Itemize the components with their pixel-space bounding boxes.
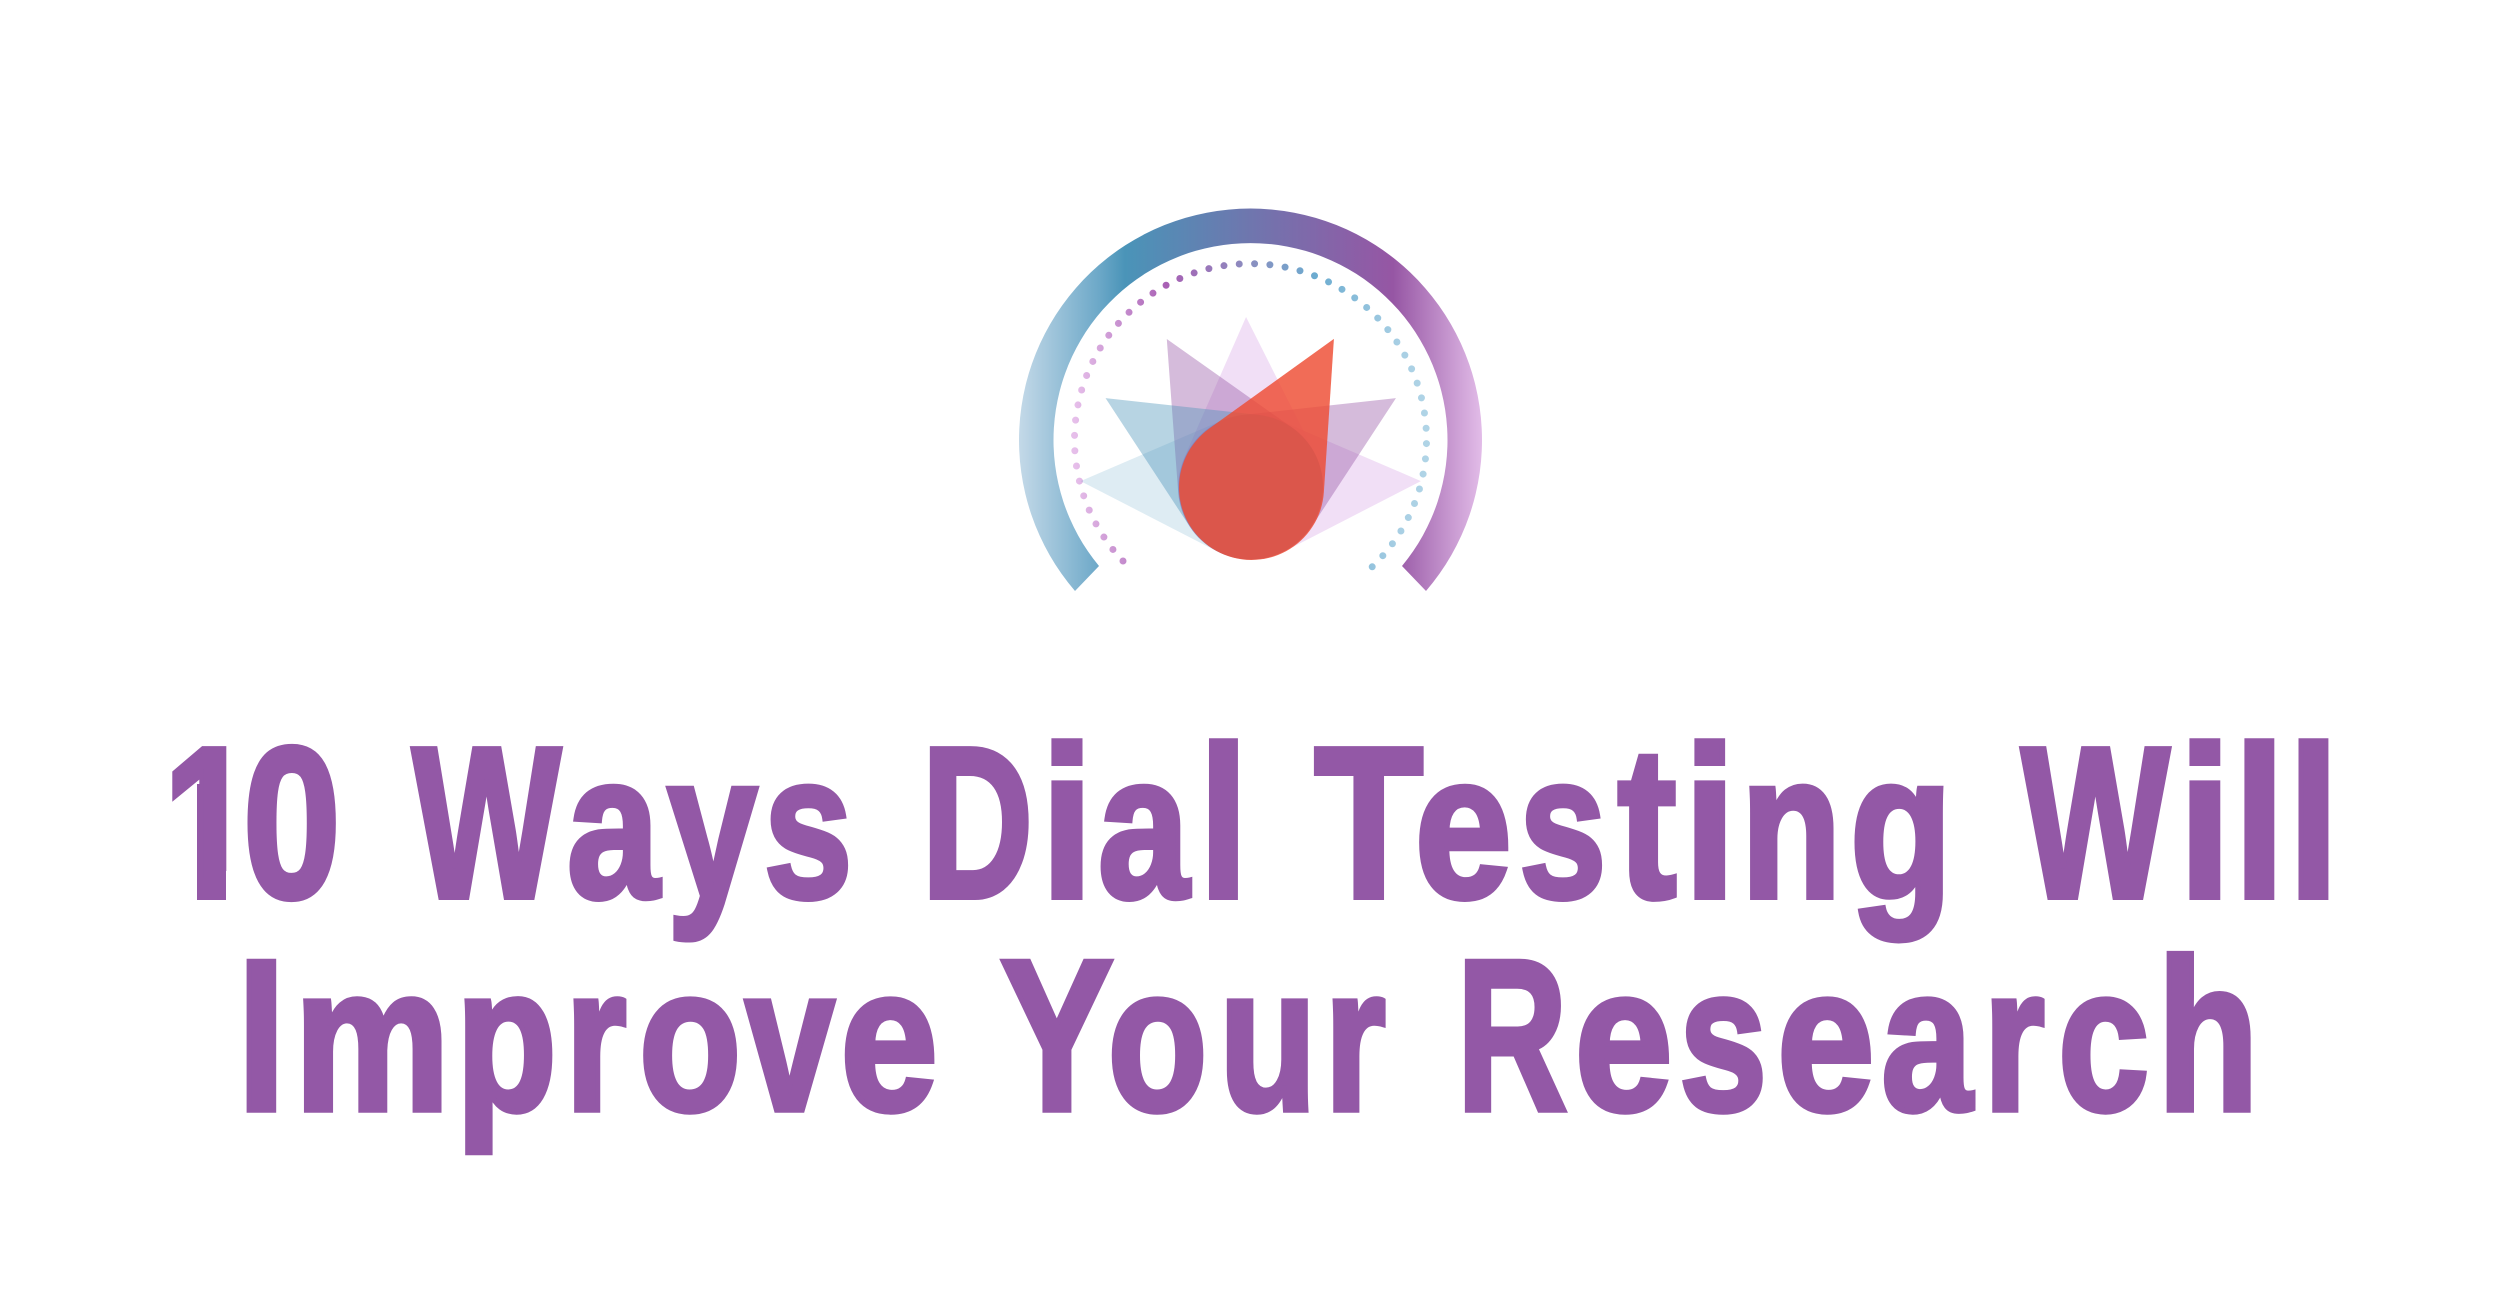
title line 1: W (412, 702, 561, 943)
title line 1: i (1041, 702, 1093, 943)
title line 2: e (1777, 925, 1874, 1154)
title line 1: i (1684, 702, 1736, 943)
title line 2: I (238, 915, 285, 1156)
title line 2: r (1325, 925, 1386, 1154)
title line 2: o (1108, 925, 1207, 1154)
title line 2: m (294, 925, 450, 1154)
title line 1: l (2288, 702, 2339, 943)
title line 2: R (1457, 915, 1567, 1156)
title line 1: e (1415, 712, 1512, 941)
title line 2: c (2058, 925, 2149, 1154)
title line 2: h (2157, 915, 2259, 1156)
title line 1: g (1850, 712, 1952, 941)
title line 1: 1 (163, 702, 254, 943)
title line 2: p (456, 925, 557, 1154)
title line 2: v (745, 925, 834, 1154)
title line 2 (238, 915, 2259, 1156)
petal: purple right (1151, 336, 1434, 587)
petal: pale pink top (1174, 315, 1325, 561)
title line 1: D (922, 702, 1033, 943)
title line 1: a (1098, 712, 1190, 941)
title line 2: s (1679, 925, 1767, 1154)
title line 1: t (1618, 702, 1676, 943)
title line 2: Y (1000, 915, 1113, 1156)
title line 1: W (2021, 702, 2169, 943)
title line 2: e (1575, 925, 1672, 1154)
title line 1: s (764, 712, 852, 941)
title line 2: r (566, 925, 626, 1154)
dotted dial ring (1074, 264, 1426, 567)
title line 1: l (1199, 702, 1248, 943)
flower petals (1068, 303, 1434, 587)
title line 1: y (667, 712, 757, 941)
petal: purple left (1104, 303, 1349, 586)
title line 2: u (1219, 925, 1317, 1154)
title line 2: o (639, 925, 741, 1154)
petal: red drop (1153, 304, 1397, 586)
title line 1 (172, 738, 2328, 944)
petal: pale pink right (1176, 409, 1423, 562)
title line 1: n (1741, 712, 1841, 941)
gauge arc (1019, 209, 1482, 591)
petal: light blue left (1078, 409, 1325, 562)
title line 1: 0 (243, 702, 341, 943)
title line 1: T (1314, 702, 1423, 943)
title line 2: a (1882, 925, 1974, 1154)
title line 1: i (2179, 702, 2231, 943)
title line 1: a (567, 712, 661, 941)
logo: dial gauge with flower (1019, 209, 1482, 591)
title line 1: l (2234, 702, 2285, 943)
title line 1: s (1519, 712, 1606, 941)
title (163, 702, 2339, 1156)
title line 2: e (840, 925, 938, 1154)
title line 2: r (1984, 925, 2045, 1154)
petal: blue left (1068, 336, 1350, 587)
